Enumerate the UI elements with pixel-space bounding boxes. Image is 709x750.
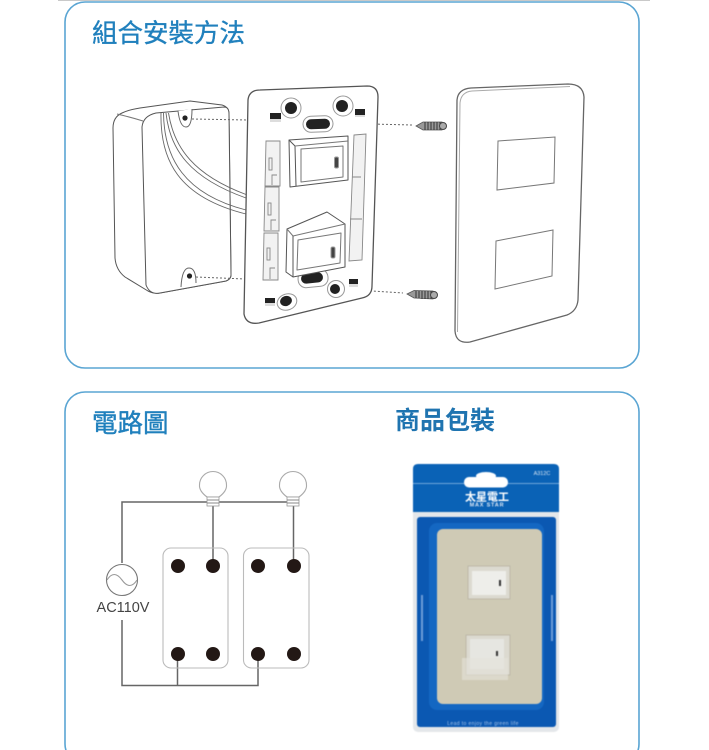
mounting holes bbox=[265, 96, 365, 313]
icon: light bulb 2 bbox=[279, 472, 307, 506]
product package photo bbox=[413, 464, 559, 732]
icon: bottom screw bbox=[407, 290, 438, 299]
switch: bottom bbox=[462, 635, 510, 680]
heading: installation method: 組合安裝方法 bbox=[92, 20, 245, 48]
brand name: MAX STAR bbox=[470, 502, 504, 508]
brand logo: 太星電工 bbox=[465, 490, 509, 504]
slogan: Lead to enjoy the green life bbox=[447, 721, 519, 727]
hang hole bbox=[464, 472, 508, 488]
icon: switch mounting plate bbox=[244, 86, 378, 323]
switch plate bbox=[437, 529, 542, 704]
icon: light bulb 1 bbox=[199, 472, 227, 506]
icon: cover plate bbox=[455, 84, 584, 342]
heading: packaging: 商品包裝 bbox=[395, 407, 495, 435]
icon: top screw bbox=[416, 122, 446, 130]
wiring bbox=[122, 502, 294, 686]
model number: A312C bbox=[534, 471, 550, 477]
heading: circuit diagram: 電路圖 bbox=[92, 410, 169, 438]
panel: installation method bbox=[65, 2, 639, 368]
terminal slots bbox=[263, 134, 366, 280]
panel: circuit and packaging bbox=[65, 392, 639, 750]
switch outline 2 bbox=[244, 548, 309, 668]
switch outline 1 bbox=[163, 548, 228, 668]
icon: wires bbox=[161, 113, 246, 214]
dotted guide lines bbox=[192, 119, 412, 293]
cover window: top bbox=[497, 137, 555, 190]
label: AC110V: AC110V bbox=[97, 600, 150, 616]
circuit diagram bbox=[97, 472, 309, 686]
icon: wall box bbox=[113, 101, 246, 293]
icon: AC source bbox=[106, 564, 138, 596]
rocker switch: top bbox=[289, 136, 348, 187]
cover window: bottom bbox=[495, 230, 553, 289]
rocker switch: bottom bbox=[286, 212, 345, 277]
switch: top bbox=[468, 566, 510, 599]
